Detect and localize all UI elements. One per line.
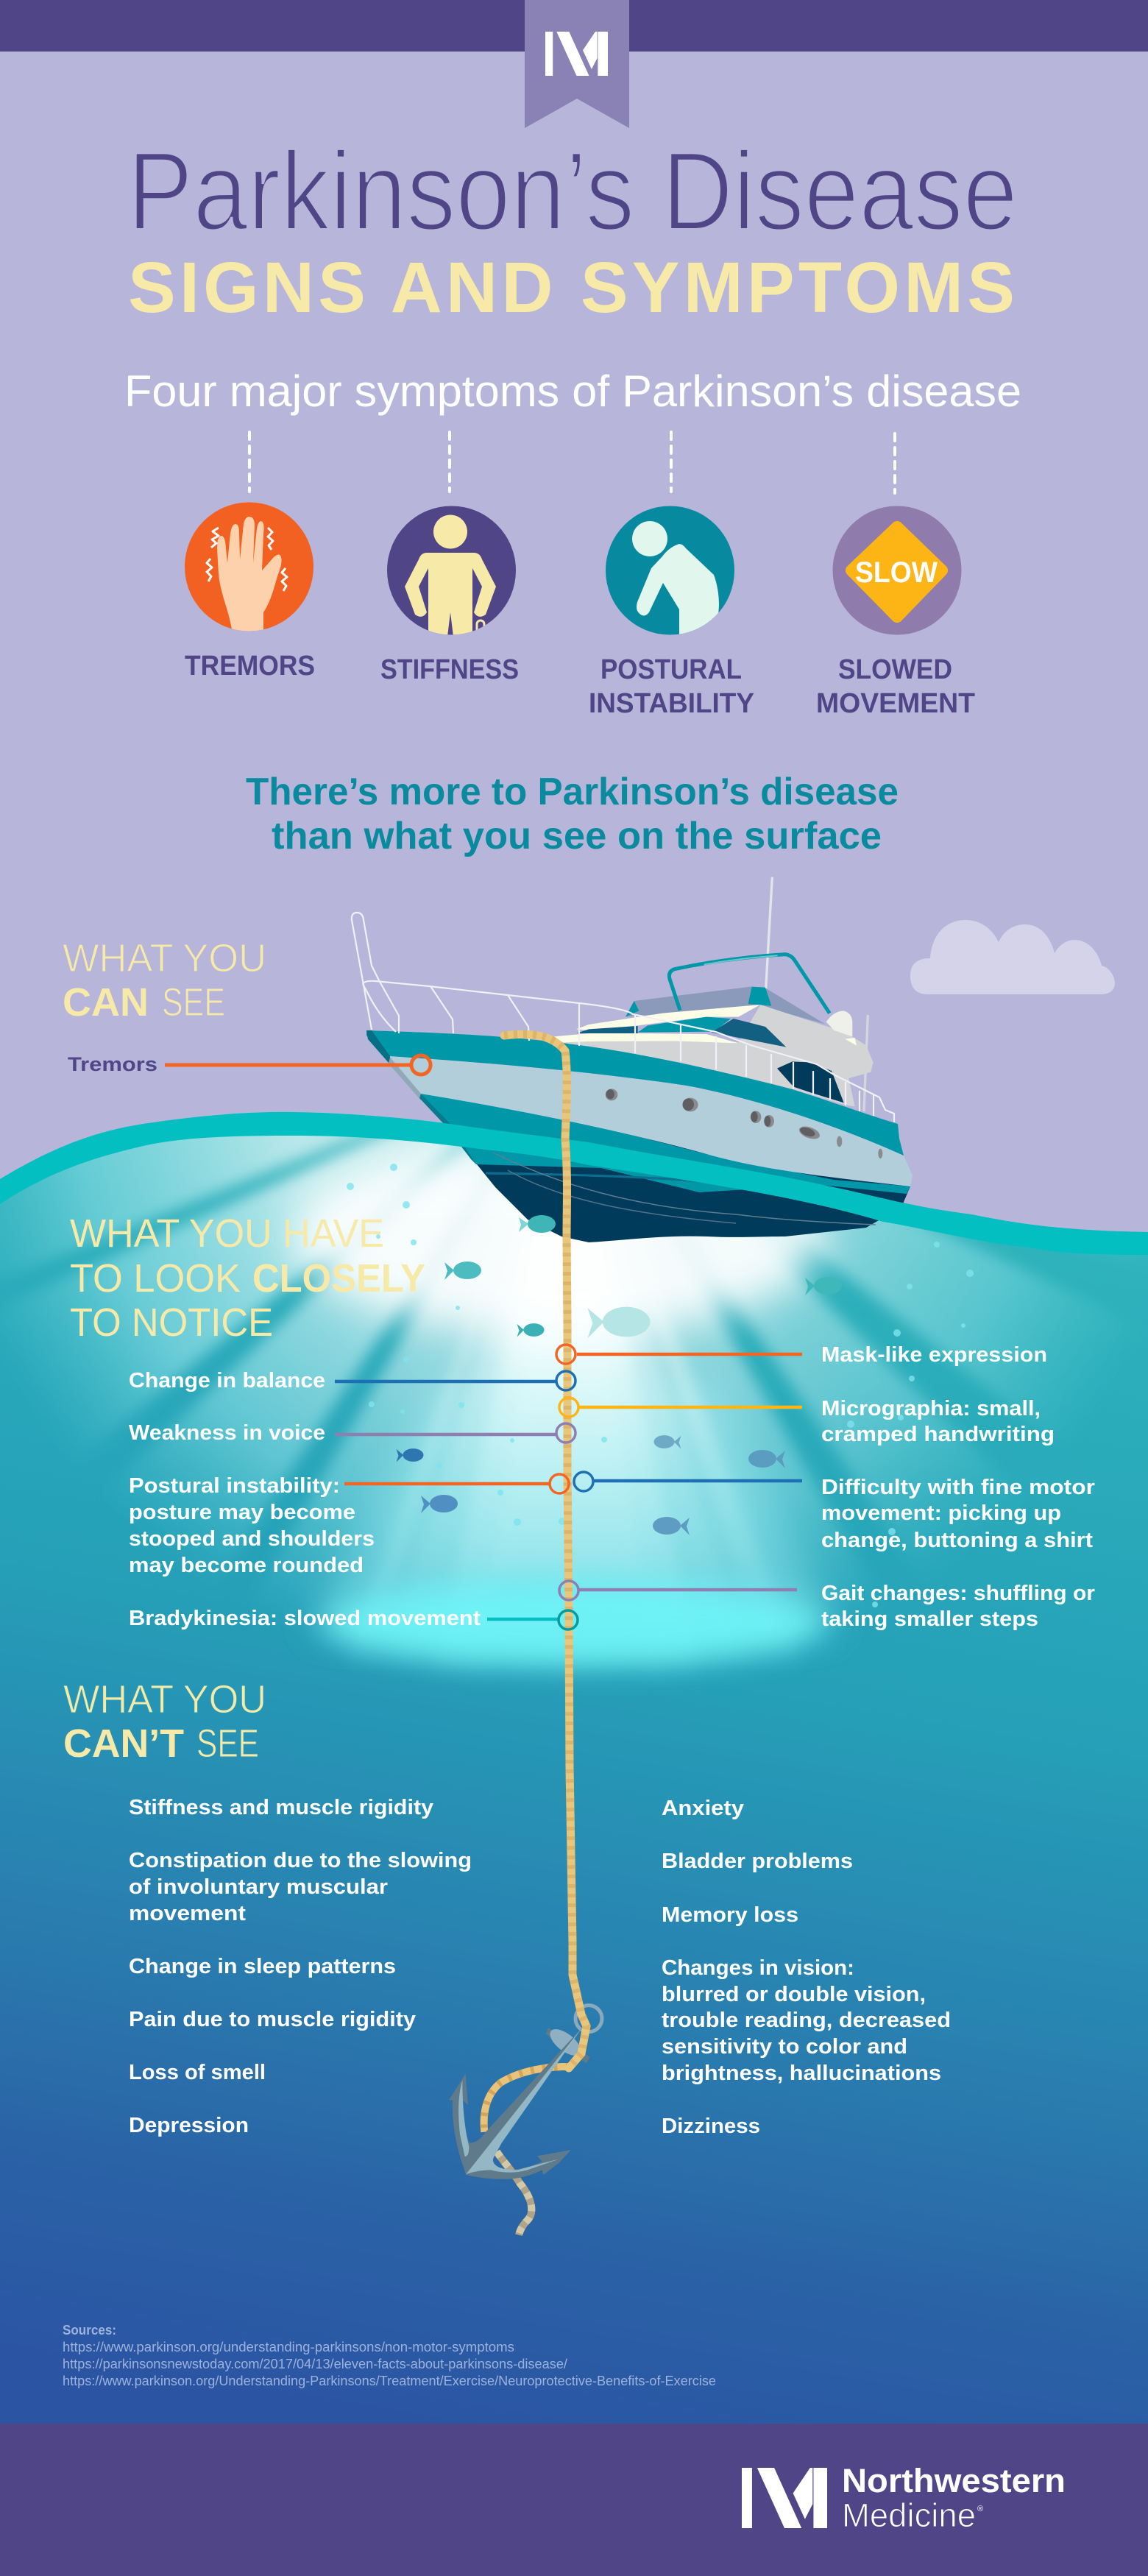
label: postural instability: POSTURAL: [600, 654, 742, 685]
list: can't see left column: Depression: [129, 2114, 249, 2137]
callout: fine motor: Difficulty with fine motor: [821, 1476, 1095, 1499]
sources: [63, 2323, 716, 2388]
icon: slow sign: [833, 506, 961, 634]
what you have to look closely heading: TO NOTICE: [70, 1301, 273, 1345]
sources: https://parkinsonsnewstoday.com/2017/04/13/eleven-facts-about-parkinsons-disease/: [63, 2357, 567, 2371]
footer logo: Medicine: [842, 2497, 976, 2534]
boat superstructure: [542, 877, 874, 1111]
portholes: [606, 1089, 882, 1158]
anchor ring: [575, 2006, 602, 2032]
list: can't see right column: Memory loss: [662, 1903, 798, 1927]
icon: stiffness figure: [387, 506, 516, 637]
label: stiffness: STIFFNESS: [380, 654, 519, 685]
footer logo: Northwestern: [842, 2462, 1066, 2499]
callout: gait changes: taking smaller steps: [821, 1607, 1038, 1631]
label: slowed movement: SLOWED: [838, 654, 952, 685]
list: can't see right column: blurred or double vision,: [662, 1983, 926, 2006]
what you can't see heading: CAN’T: [63, 1722, 184, 1766]
label: tremors: TREMORS: [185, 651, 315, 682]
callout: gait changes: [559, 1581, 1095, 1631]
callout: mask-like expression: Mask-like expression: [821, 1343, 1047, 1367]
sources: Sources:: [63, 2323, 116, 2338]
anchor highlights: [458, 2027, 583, 2174]
what you can see heading: WHAT YOU: [63, 936, 266, 980]
callout: change in balance: Change in balance: [129, 1369, 325, 1393]
dashed connectors: [249, 432, 895, 493]
callout: micrographia: cramped handwriting: [821, 1423, 1055, 1446]
callout: postural instability: stooped and shoulders: [129, 1527, 375, 1551]
list: can't see left column: Stiffness and muscle rigidity: [129, 1796, 433, 1819]
fish: [396, 1215, 842, 1535]
hull upper stripe: [366, 1030, 904, 1156]
list: can't see right column: brightness, hallucinations: [662, 2062, 941, 2085]
list: can't see right column: Changes in vision:: [662, 1956, 854, 1980]
list: can't see left column: Change in sleep patterns: [129, 1955, 396, 1978]
header bar: [0, 0, 1148, 52]
icon: slow sign: SLOW: [855, 556, 938, 589]
list: can't see right column: [662, 1797, 951, 2138]
list: can't see right column: Bladder problems: [662, 1850, 853, 1873]
sources: https://www.parkinson.org/understanding-parkinsons/non-motor-symptoms: [63, 2340, 514, 2354]
hull lower stripe: [421, 1094, 910, 1194]
callout: postural instability: Postural instability:: [129, 1474, 340, 1498]
list: can't see left column: movement: [129, 1902, 246, 1925]
callout: micrographia: Micrographia: small,: [821, 1397, 1041, 1420]
rails: [352, 913, 894, 1122]
footer logo: ®: [977, 2505, 983, 2513]
callout: postural instability: posture may become: [129, 1501, 355, 1524]
callout: weakness in voice: [129, 1421, 575, 1445]
footer logo: [742, 2462, 1066, 2534]
anchor stock: [545, 2024, 590, 2063]
list: can't see left column: [129, 1796, 472, 2137]
footer band: [0, 2424, 1148, 2576]
callout: postural instability: [129, 1474, 569, 1577]
what you can see heading: SEE: [162, 980, 225, 1025]
callout: weakness in voice: Weakness in voice: [129, 1421, 325, 1445]
list: can't see right column: Dizziness: [662, 2115, 760, 2138]
more than the surface heading: than what you see on the surface: [272, 815, 882, 857]
callout: micrographia: [559, 1397, 1055, 1446]
cloud: [910, 920, 1115, 994]
list: can't see right column: trouble reading, decreased: [662, 2009, 951, 2032]
four major symptoms heading: Four major symptoms of Parkinson’s disease: [124, 367, 1021, 416]
what you can't see heading: SEE: [196, 1722, 259, 1766]
hull navy: [444, 1104, 910, 1242]
callout: fine motor: movement: picking up: [821, 1501, 1061, 1525]
bow details: [366, 1030, 476, 1164]
list: can't see left column: of involuntary muscular: [129, 1875, 388, 1899]
what you can't see heading: [63, 1677, 266, 1766]
list: can't see left column: Loss of smell: [129, 2061, 266, 2084]
callout: postural instability: may become rounded: [129, 1554, 364, 1577]
callout: fine motor: change, buttoning a shirt: [821, 1529, 1093, 1552]
list: can't see right column: sensitivity to color and: [662, 2035, 907, 2059]
list: can't see left column: Constipation due to the slowing: [129, 1849, 472, 1872]
title: Parkinson’s Disease: [127, 129, 1018, 254]
subtitle: SIGNS AND SYMPTOMS: [128, 247, 1015, 328]
what you have to look closely heading: [70, 1211, 425, 1345]
water with light rays: [0, 977, 1148, 2424]
hull lines: [486, 1153, 876, 1225]
ribbon with logo: [525, 0, 629, 128]
list: can't see right column: Anxiety: [662, 1797, 744, 1820]
more than the surface heading: There’s more to Parkinson’s disease: [246, 771, 899, 813]
callout: tremors: [68, 1053, 431, 1075]
label: postural instability: [589, 654, 754, 719]
callout: bradykinesia: Bradykinesia: slowed movement: [129, 1607, 481, 1630]
what you have to look closely heading: WHAT YOU HAVE: [70, 1211, 384, 1256]
label: postural instability: INSTABILITY: [589, 688, 754, 719]
bubbles: [347, 1164, 974, 1607]
icon: postural instability figure: [606, 506, 734, 640]
what you have to look closely heading: CLOSELY: [252, 1256, 425, 1301]
callout: fine motor: [574, 1472, 1095, 1552]
rope behind anchor: [484, 2067, 569, 2235]
more than the surface heading: [246, 771, 899, 857]
label: slowed movement: [816, 654, 975, 719]
what you can't see heading: WHAT YOU: [63, 1677, 266, 1722]
callout: mask-like expression: [556, 1343, 1047, 1367]
rope: [504, 1034, 587, 2068]
what you can see heading: CAN: [63, 980, 149, 1025]
callout: tremors: Tremors: [68, 1053, 157, 1075]
callout: gait changes: Gait changes: shuffling or: [821, 1582, 1095, 1605]
what you can see heading: [63, 936, 266, 1025]
boat: [352, 877, 913, 1242]
icon: tremors hand: [185, 502, 313, 634]
anchor: [449, 2006, 602, 2235]
panel: four symptoms: [185, 432, 975, 719]
anchor body: [449, 2027, 583, 2179]
callout: change in balance: [129, 1369, 575, 1393]
what you have to look closely heading: TO LOOK: [70, 1256, 241, 1301]
label: slowed movement: MOVEMENT: [816, 688, 975, 719]
list: can't see left column: Pain due to muscle rigidity: [129, 2008, 416, 2031]
wave crest: [0, 1112, 1148, 1255]
sources: https://www.parkinson.org/Understanding-Parkinsons/Treatment/Exercise/Neuroprotective-Benefits-of-Exercise: [63, 2374, 716, 2388]
hull light band: [390, 1056, 913, 1186]
fish and bubbles: [347, 1164, 974, 1607]
